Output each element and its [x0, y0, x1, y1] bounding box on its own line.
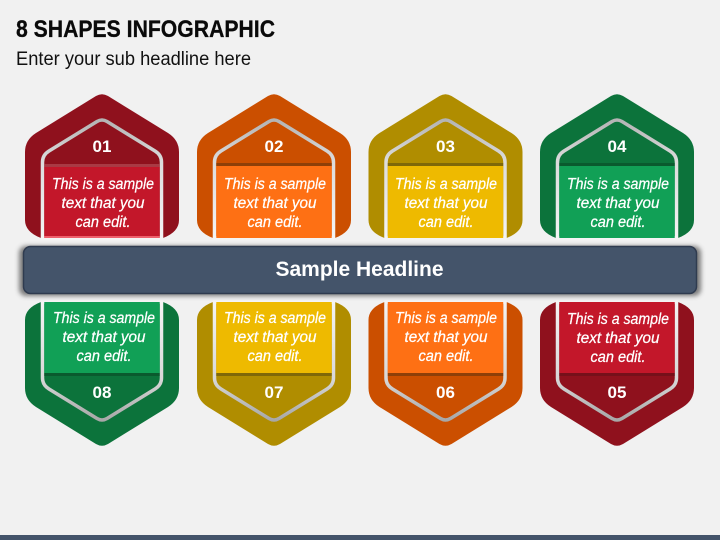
shape 02: [197, 94, 351, 238]
number 07: 07: [265, 383, 283, 402]
subtitle: Enter your sub headline here: [16, 49, 251, 70]
shape 05: can edit.: [590, 349, 646, 366]
shape 05: [540, 302, 694, 446]
text 04: This is a sample: [567, 176, 669, 193]
shape 06: [368, 302, 522, 446]
shape 01: text that you: [62, 195, 145, 212]
title: 8 SHAPES INFOGRAPHIC: [16, 16, 275, 43]
shape 03: text that you: [404, 195, 488, 212]
footer strip: [0, 535, 720, 540]
text 03: This is a sample: [395, 176, 497, 193]
headline bar: [19, 246, 701, 296]
shape 01: [25, 94, 179, 238]
text 01: This is a sample: [52, 176, 154, 193]
shape 08: [25, 302, 179, 446]
shape 04: [540, 94, 694, 238]
text 08: This is a sample: [53, 310, 155, 327]
number 06: 06: [436, 383, 455, 402]
number 01: 01: [93, 137, 111, 156]
shape 03: can edit.: [418, 214, 474, 231]
number 04: 04: [608, 137, 627, 156]
shape 07: text that you: [234, 329, 317, 346]
number 08: 08: [93, 383, 111, 402]
text 02: This is a sample: [224, 176, 326, 193]
shape 08: can edit.: [76, 348, 132, 365]
shape 06: text that you: [404, 329, 488, 346]
shape 03: [368, 94, 522, 238]
shape 05: text that you: [576, 330, 660, 347]
number 02: 02: [265, 137, 283, 156]
text 06: This is a sample: [395, 310, 497, 327]
shape 06: can edit.: [418, 348, 474, 365]
shape 07: can edit.: [248, 348, 302, 365]
shape 04: can edit.: [590, 214, 646, 231]
shape 02: text that you: [234, 195, 317, 212]
text 05: This is a sample: [567, 311, 669, 328]
shape 01: can edit.: [76, 214, 130, 231]
text 07: This is a sample: [224, 310, 326, 327]
shape 07: [197, 302, 351, 446]
number 03: 03: [436, 137, 455, 156]
shape 02: can edit.: [248, 214, 302, 231]
shape 04: text that you: [576, 195, 660, 212]
shape 08: text that you: [62, 329, 146, 346]
headline text: Sample Headline: [276, 258, 444, 281]
number 05: 05: [608, 383, 626, 402]
